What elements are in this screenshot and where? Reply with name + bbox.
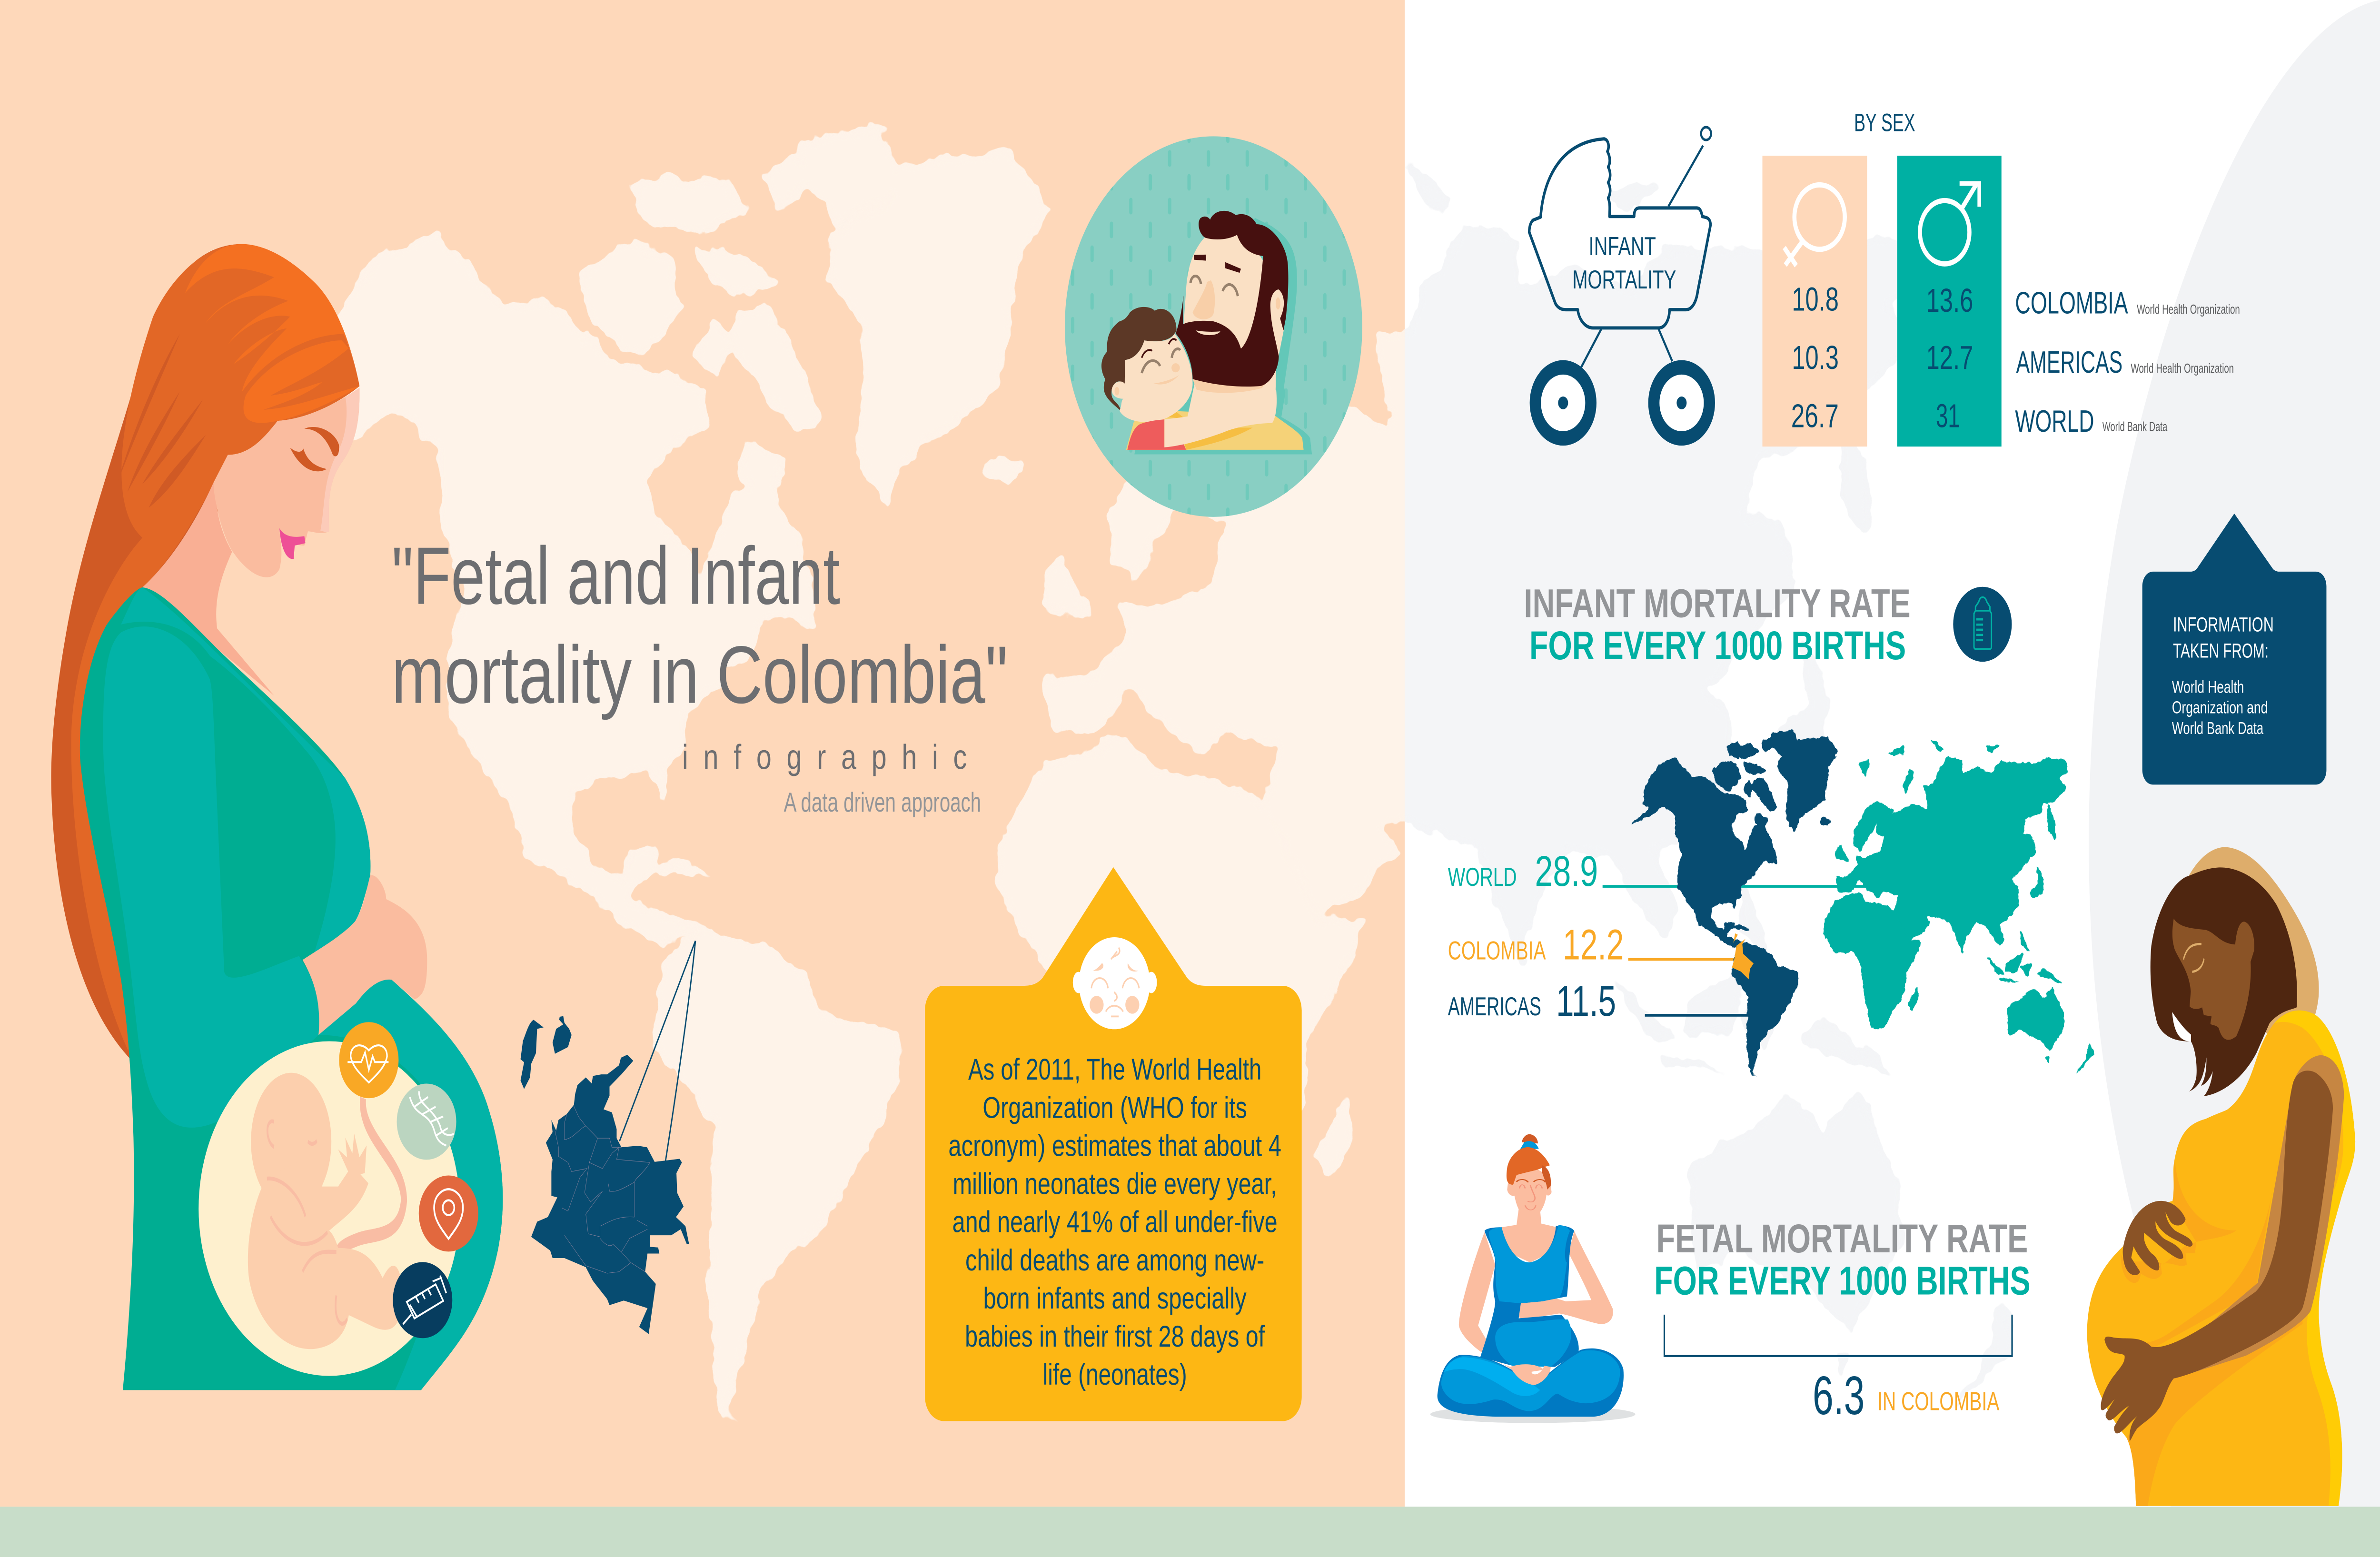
label: world: WORLD (1448, 863, 1517, 892)
illustration: pregnant woman with orange hair (51, 244, 503, 1390)
icon: male symbol (1920, 183, 1979, 264)
hair (1507, 1147, 1550, 1185)
hair bun (1522, 1134, 1538, 1143)
face (1507, 1168, 1552, 1220)
dash pattern (1065, 136, 1362, 517)
source text: Organization and (2172, 698, 2268, 717)
colored world map (1628, 730, 2094, 1081)
title second line: mortality in Colombia" (392, 629, 1008, 720)
callout text: acronym) estimates that about 4 (948, 1129, 1281, 1162)
face (214, 388, 359, 577)
value: fetal mortality: 6.3 (1813, 1365, 1864, 1426)
heading: by sex: BY SEX (1854, 109, 1915, 137)
Colombia highlight (1732, 933, 1754, 979)
value: world: 28.9 (1535, 848, 1598, 895)
region labels with sources: COLOMBIA (2015, 286, 2128, 320)
dress (80, 587, 503, 1390)
left arm (1459, 1232, 1542, 1384)
right grey backdrop shape (2089, 0, 2380, 1507)
dress light areas (121, 587, 503, 1390)
icon: female symbol (1784, 185, 1845, 266)
icon: baby bottle (1953, 587, 2012, 662)
dress highlight (2274, 1011, 2355, 1506)
panel: female column (1762, 156, 1867, 446)
upper hand (2123, 1201, 2192, 1275)
panel: male column (1897, 156, 2002, 446)
male values: 31 (1936, 398, 1960, 435)
hand on belly (303, 875, 427, 1035)
value: americas: 11.5 (1556, 978, 1616, 1025)
region labels with sources: World Health Organization (2131, 361, 2234, 376)
source text: World Health (2172, 677, 2244, 696)
callout text: born infants and specially (983, 1281, 1247, 1315)
label: in colombia: IN COLOMBIA (1877, 1387, 1999, 1416)
callout: WHO statistic (925, 867, 1302, 1421)
region labels with sources: World Health Organization (2137, 302, 2240, 317)
dress (1480, 1226, 1579, 1367)
eye and brow (290, 427, 339, 471)
icon: syringe (393, 1262, 452, 1338)
hair gap (2172, 1012, 2191, 1041)
illustration: father hugging child (1065, 136, 1362, 517)
head wrap (2174, 847, 2319, 1037)
neck and shoulders (1502, 1209, 1557, 1262)
callout text: life (neonates) (1043, 1358, 1187, 1391)
icon: location pin (419, 1175, 478, 1251)
icon: sad baby face (1073, 937, 1157, 1029)
face (2172, 919, 2254, 1040)
callout text: and nearly 41% of all under-five (952, 1205, 1278, 1239)
female values (1791, 281, 1839, 435)
callout: information source (2142, 514, 2326, 784)
heading: fetal mortality rate: FETAL MORTALITY RATE (1656, 1216, 2028, 1261)
stroller label line 2: MORTALITY (1572, 266, 1676, 294)
Americas and rest of the world (1628, 730, 2094, 1081)
region labels with sources: World Bank Data (2102, 419, 2167, 434)
region labels with sources: WORLD (2015, 404, 2094, 439)
female values: 26.7 (1791, 398, 1839, 435)
bracket (1664, 1315, 2012, 1356)
heading: for every 1000 births: FOR EVERY 1000 BIRTHS (1529, 623, 1906, 668)
face highlight (320, 388, 359, 532)
callout text: babies in their first 28 days of (965, 1319, 1265, 1353)
icon: DNA (397, 1084, 456, 1160)
hair (2151, 867, 2297, 1096)
arm (2175, 1055, 2344, 1378)
fetus (248, 1073, 402, 1349)
lower hand (1510, 1364, 1551, 1385)
subtitle: infographic: infographic (682, 737, 967, 776)
lips (279, 528, 306, 559)
value: colombia: 12.2 (1563, 921, 1624, 969)
source text (2172, 614, 2274, 738)
source text: World Bank Data (2172, 719, 2263, 738)
callout text: Organization (WHO for its (982, 1091, 1247, 1124)
left panel background (0, 0, 1405, 1507)
callout shape (925, 867, 1302, 1421)
map of Colombia (521, 941, 695, 1334)
title: "Fetal and Infant (392, 530, 840, 621)
illustration: pregnant woman in yellow dress (2087, 847, 2355, 1506)
dress (2087, 1011, 2355, 1506)
figures (1101, 211, 1312, 454)
male values (1926, 283, 1973, 435)
callout text: child deaths are among new- (965, 1243, 1264, 1277)
hair (51, 244, 359, 1059)
bottom strip (0, 1507, 2380, 1557)
region labels with sources: AMERICAS (2016, 345, 2122, 379)
label: colombia: COLOMBIA (1448, 937, 1546, 965)
source text: INFORMATION (2173, 614, 2274, 636)
umbilical cord (338, 1098, 404, 1252)
callout text: million neonates die every year, (953, 1167, 1277, 1200)
dress shadow (2121, 1110, 2302, 1506)
heading: for every 1000 births: FOR EVERY 1000 BIRTHS (1654, 1259, 2031, 1303)
leader lines (1603, 885, 1876, 1017)
male values: 12.7 (1926, 340, 1973, 377)
crossed legs (1438, 1349, 1624, 1417)
neck (142, 483, 274, 695)
female values: 10.3 (1792, 340, 1839, 377)
label: americas: AMERICAS (1448, 992, 1541, 1021)
male values: 13.6 (1926, 283, 1973, 319)
callout text: As of 2011, The World Health (968, 1052, 1261, 1086)
stroller label line 1: INFANT (1589, 232, 1656, 261)
region labels with sources (2015, 286, 2240, 439)
right arm (1517, 1231, 1613, 1324)
callout text (948, 1052, 1281, 1391)
background world map: left panel (328, 122, 1405, 1421)
background world map: right panel (1405, 164, 2014, 1406)
sleeve (103, 626, 319, 1128)
womb (198, 1041, 460, 1376)
circle background (1065, 136, 1362, 517)
illustration: meditating pregnant woman (1430, 1134, 1636, 1423)
female values: 10.8 (1792, 281, 1839, 318)
icon: heartbeat (339, 1022, 398, 1098)
heading: infant mortality rate: INFANT MORTALITY RATE (1524, 581, 1911, 626)
subtitle: data driven: A data driven approach (784, 787, 981, 817)
right panel background (1405, 0, 2380, 1507)
source text: TAKEN FROM: (2173, 640, 2269, 663)
icon: stroller (1529, 127, 1711, 438)
